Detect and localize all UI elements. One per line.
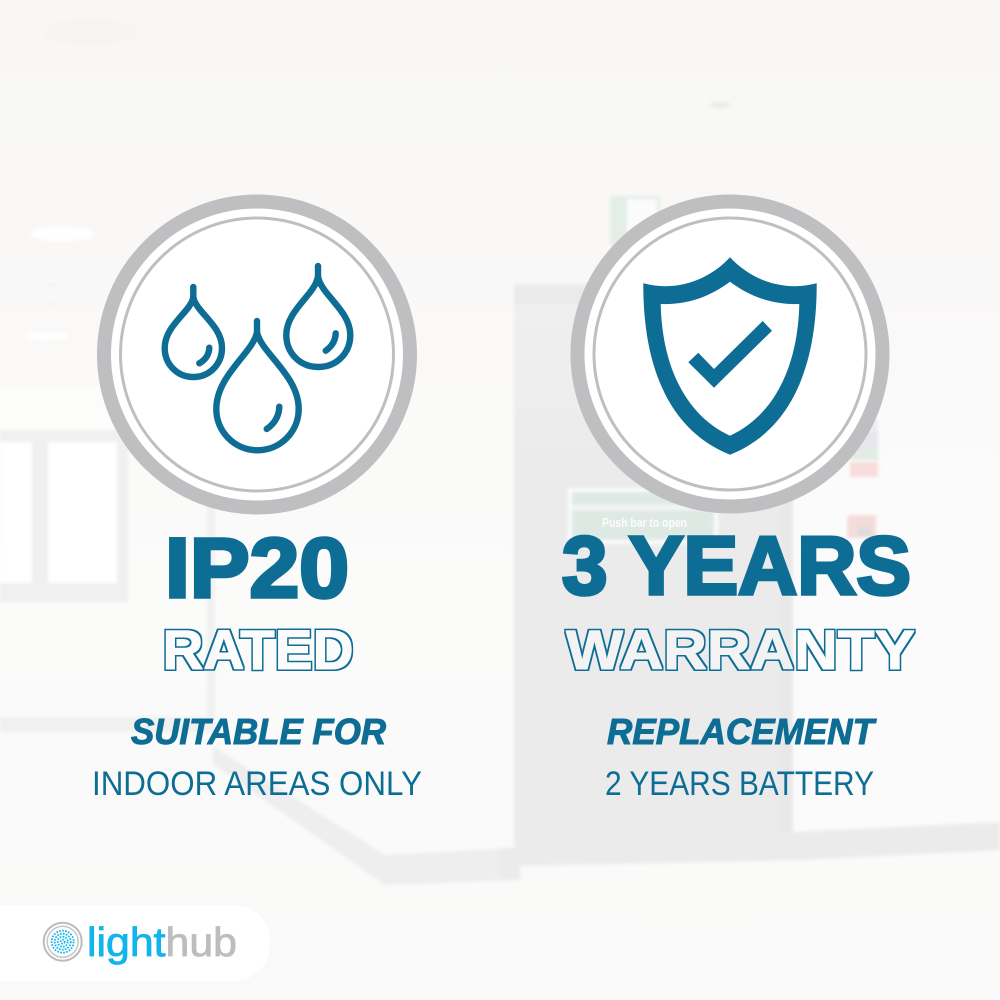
right badge: shield	[578, 202, 882, 506]
right label: REPLACEMENT: REPLACEMENT	[607, 711, 877, 752]
icon: shield	[643, 257, 817, 455]
icon: large middle drop	[216, 321, 299, 450]
icon: water drops	[165, 266, 350, 450]
left subheading: RATED: RATED	[162, 618, 354, 681]
left heading: IP20: IP20	[165, 521, 349, 615]
icon: small right drop	[286, 266, 350, 367]
left detail: INDOOR AREAS ONLY: INDOOR AREAS ONLY	[92, 765, 422, 803]
icon: check mark	[688, 321, 772, 388]
right subheading: WARRANTY: WARRANTY	[566, 618, 915, 681]
right detail: 2 YEARS BATTERY: 2 YEARS BATTERY	[605, 765, 874, 803]
icon: lighthub logo mark	[44, 923, 82, 961]
icon: small left drop	[165, 287, 222, 377]
right heading: 3 YEARS: 3 YEARS	[562, 519, 911, 612]
logo pill	[0, 905, 270, 981]
logo wordmark: lighthub	[87, 919, 237, 965]
left label: SUITABLE FOR: SUITABLE FOR	[131, 711, 386, 752]
background sign text: Push bar to open	[602, 515, 687, 530]
left badge: water drops	[104, 202, 410, 508]
badge ring	[578, 202, 882, 506]
badge ring	[104, 202, 410, 508]
